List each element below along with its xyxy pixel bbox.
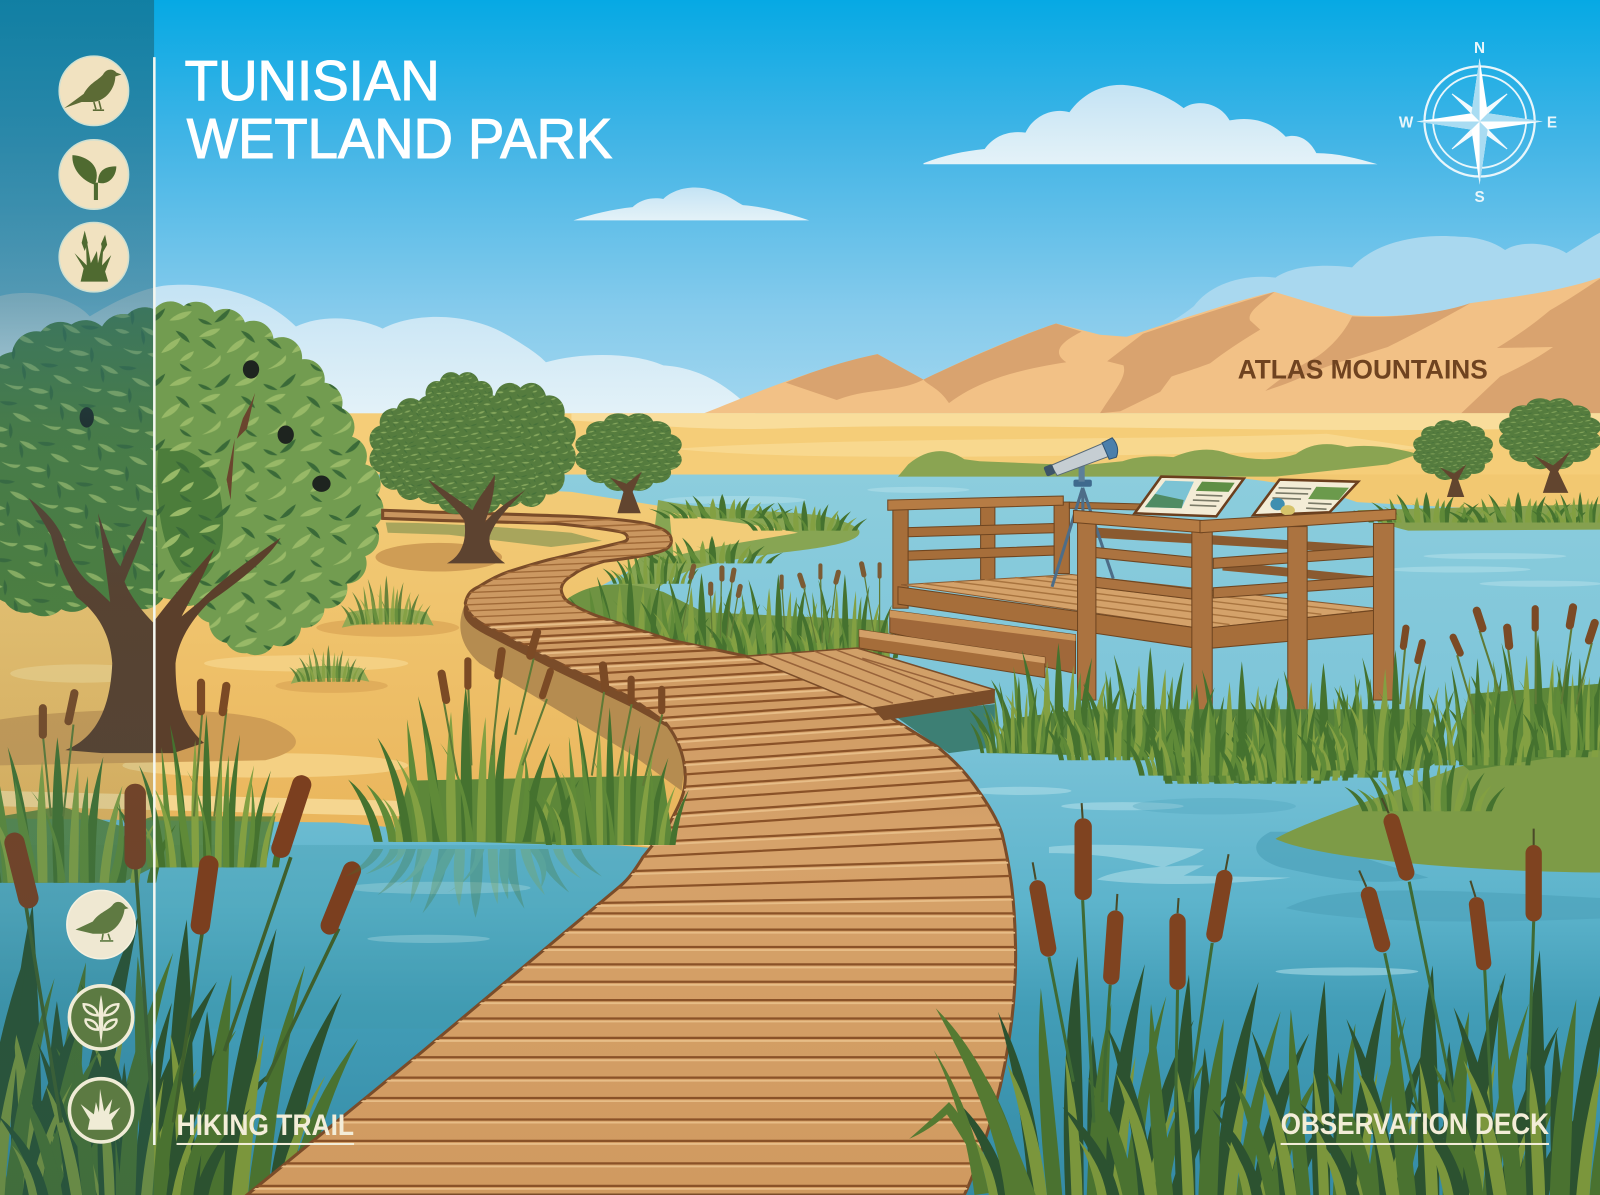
compass rose: S — [1474, 189, 1485, 206]
cloud bank: behind mountains — [1143, 233, 1600, 337]
icon: leaf badge lower — [69, 986, 133, 1049]
sky — [0, 0, 1600, 480]
sand shore: left — [0, 478, 704, 852]
olives — [80, 360, 331, 492]
info panel: right — [1253, 480, 1358, 515]
front railing — [1073, 509, 1396, 719]
reeds under deck — [969, 643, 1474, 784]
deck fascia — [898, 587, 1386, 649]
back railing — [888, 496, 1148, 608]
mountains: Atlas range — [704, 278, 1600, 413]
deck floor — [901, 575, 1383, 629]
label: Hiking Trail: HIKING TRAIL — [177, 1109, 354, 1142]
big olive tree — [0, 301, 384, 753]
icon: bird badge lower — [67, 890, 135, 959]
grass tuft small — [289, 645, 369, 684]
icon: sprout badge — [59, 140, 129, 209]
observation deck — [746, 438, 1396, 720]
reeds beside boardwalk — [348, 686, 689, 845]
side rails through — [1096, 528, 1376, 585]
icon: bird badge — [59, 56, 129, 126]
reed reflection on water — [345, 849, 602, 918]
canopy right — [153, 301, 384, 655]
tree: far right pair — [1413, 398, 1600, 497]
side panel overlay — [0, 0, 154, 1195]
walkway — [746, 648, 995, 720]
cattails: foreground right — [1028, 798, 1542, 1123]
dark water shadow under walkway — [893, 704, 995, 753]
fascia — [464, 603, 693, 827]
sand patches — [0, 522, 653, 847]
far desert plain — [0, 413, 1600, 485]
reeds: left shore — [0, 714, 293, 883]
icon: reed badge — [59, 222, 129, 292]
water ripples — [347, 487, 1600, 976]
island: right marsh — [1276, 635, 1600, 873]
water dark patches — [1133, 798, 1600, 921]
compass rose: E — [1547, 115, 1557, 132]
compass rose: N — [1474, 40, 1485, 57]
far right marsh — [1353, 492, 1600, 531]
label: Atlas Mountains: ATLAS MOUNTAINS — [1238, 355, 1488, 385]
cloud bank: left horizon — [0, 285, 760, 418]
grass tuft — [341, 576, 434, 628]
compass rose — [1399, 40, 1557, 206]
boardwalk shadow on sand — [460, 603, 686, 791]
far green hills — [898, 444, 1418, 477]
info panel: left — [1135, 477, 1244, 516]
left pond teal overlay — [0, 845, 673, 1029]
foreground reeds: right — [909, 950, 1600, 1195]
far shore sand — [1204, 475, 1600, 515]
boardwalk trail — [245, 503, 1031, 1195]
steps — [890, 610, 1076, 674]
cattails: mid — [39, 603, 1600, 816]
tree: mid olive — [369, 372, 576, 563]
title — [185, 49, 612, 170]
lagoon reeds behind boardwalk — [548, 561, 908, 659]
compass rose: W — [1399, 115, 1414, 132]
upper shore marsh — [603, 494, 867, 592]
label: Observation Deck: OBSERVATION DECK — [1281, 1108, 1550, 1141]
cloud: large upper — [923, 85, 1378, 164]
canopy left — [0, 307, 165, 616]
water — [0, 475, 1600, 1195]
foreground reeds: left — [0, 904, 391, 1195]
panel divider line — [153, 57, 156, 1145]
cloud: small upper — [573, 188, 809, 220]
tree: distant olive — [575, 413, 682, 513]
telescope — [1043, 438, 1118, 587]
canopy shadow — [157, 448, 223, 582]
cattails: foreground left — [2, 773, 364, 1123]
icon: grass badge lower — [69, 1079, 133, 1142]
title: WETLAND PARK — [187, 107, 612, 170]
title: TUNISIAN — [185, 49, 440, 112]
trunk and branches — [29, 498, 281, 753]
